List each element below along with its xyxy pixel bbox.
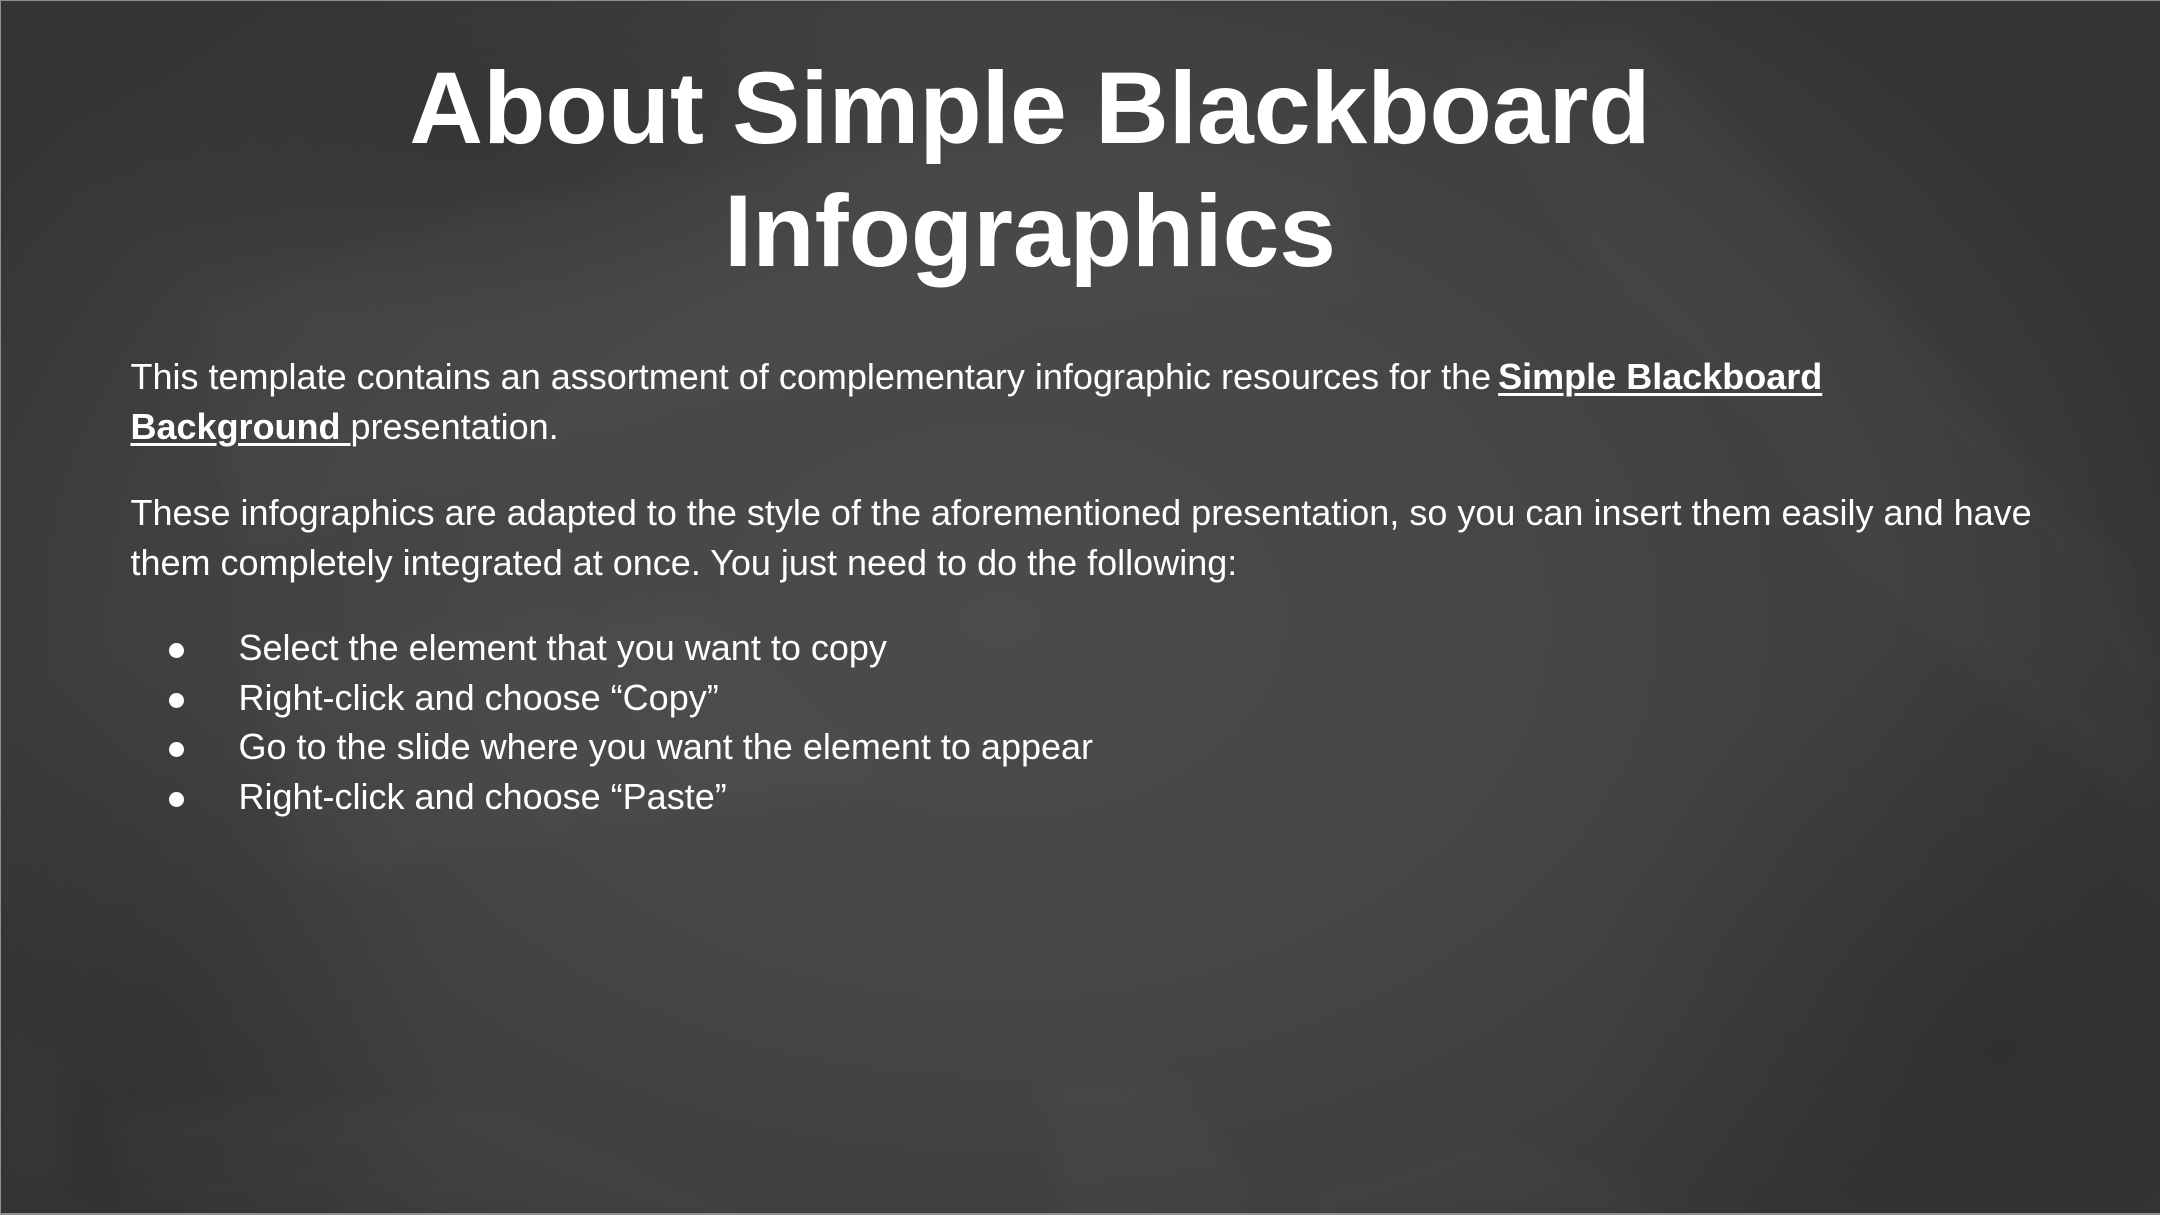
slide edge lines [0,0,2160,1]
bulleted list of steps [169,627,1093,817]
bulleted list of steps: Go to the slide where you want the element to appear [238,726,1093,767]
text block: intro paragraph [130,356,1822,447]
bulleted list of steps: Right-click and choose “Paste” [238,776,727,817]
text block: intro paragraph: Background presentation. [130,406,559,447]
title: About Simple Blackboard [409,51,1651,165]
text block: instructions paragraph [130,492,2032,583]
bulleted list of steps: Right-click and choose “Copy” [238,677,719,718]
title: Infographics [724,174,1336,288]
bulleted list of steps: Select the element that you want to copy [238,627,887,668]
text block: intro paragraph: This template contains an assortment of complementary infographic resources for the Simple Blackboard [130,356,1822,397]
text block: instructions paragraph: them completely integrated at once. You just need to do the following: [130,542,1237,583]
text block: instructions paragraph: These infographics are adapted to the style of the aforementioned presentation, so you can insert them easily and have [130,492,2032,533]
title [409,51,1651,288]
